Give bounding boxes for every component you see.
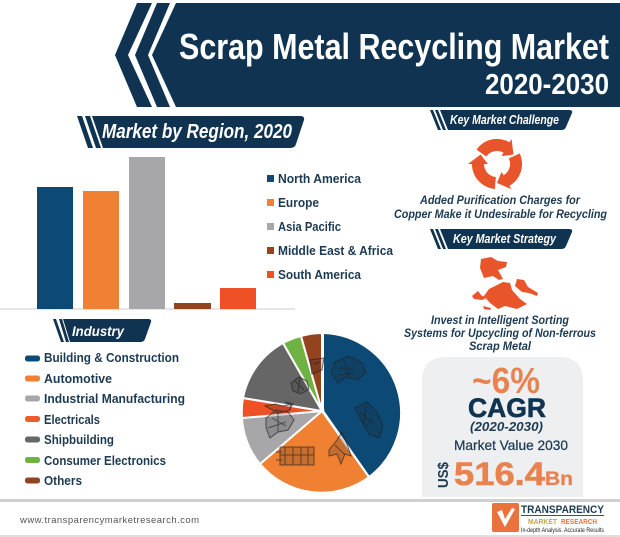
heading: industry: Industry [72, 323, 125, 339]
legend: regions: Europe [278, 195, 319, 210]
legend: industry: Industrial Manufacturing [44, 391, 185, 406]
legend: industry: Others [44, 473, 82, 488]
logo: transparency market research: MARKET [528, 517, 557, 526]
text: strategy description [404, 313, 596, 353]
legend: industry: Electricals [44, 412, 100, 427]
icon: recycling arrows [467, 136, 531, 195]
heading: key market challenge [430, 110, 572, 130]
legend: regions: Asia Pacific [278, 219, 341, 234]
CAGR period: (2020-2030) [470, 420, 543, 434]
icon: scrap metal pile [472, 257, 538, 310]
footer divider [0, 499, 620, 502]
logo: transparency market research: In-depth Analysis. Accurate Results [521, 528, 604, 534]
legend: industry: Building & Construction [44, 350, 179, 365]
legend: industry: Automotive [44, 371, 112, 386]
logo: transparency market research: RESEARCH [561, 517, 597, 526]
panel: CAGR and market value: Bn [545, 469, 573, 490]
legend: regions: South America [278, 267, 362, 282]
bottom line [0, 535, 620, 537]
currency label: US$ [435, 461, 452, 488]
legend: regions: Middle East & Africa [278, 243, 394, 258]
CAGR label: CAGR [468, 393, 546, 423]
title years: 2020-2030 [485, 69, 609, 101]
logo: transparency market research [492, 503, 605, 534]
footer url: www.transparencymarketresearch.com [19, 515, 199, 526]
heading: market by region: Market by Region, 2020 [102, 121, 292, 143]
heading: industry [53, 319, 151, 342]
legend: industry: Shipbuilding [44, 432, 114, 447]
logo: transparency market research: TRANSPARENCY [521, 504, 605, 516]
CAGR percentage: ~6% [472, 360, 540, 401]
pie chart: industry [242, 333, 401, 493]
text: strategy description: Systems for Upcycling of Non-ferrous [404, 326, 596, 340]
text: strategy description: Invest in Intelligent Sorting [431, 313, 570, 327]
text: challenge description [394, 193, 608, 221]
header banner [115, 3, 620, 107]
heading: key market strategy [430, 229, 572, 249]
panel: CAGR and market value [422, 357, 583, 497]
legend: industry [25, 350, 185, 488]
heading: key market challenge: Key Market Challenge [450, 113, 559, 127]
heading: market by region [77, 116, 304, 148]
pie overlay: scrap sketches [265, 356, 383, 465]
text: strategy description: Scrap Metal [469, 339, 532, 353]
legend: regions: North America [278, 171, 362, 186]
text: challenge description: Added Purification Charges for [419, 193, 581, 207]
legend: regions [267, 171, 394, 282]
logo mark [492, 503, 519, 532]
market value label: Market Value 2030 [454, 437, 568, 453]
market value number: 516.4 [454, 456, 545, 492]
bar chart: market by region [0, 157, 295, 310]
heading: key market strategy: Key Market Strategy [453, 232, 557, 246]
legend: industry: Consumer Electronics [44, 453, 166, 468]
